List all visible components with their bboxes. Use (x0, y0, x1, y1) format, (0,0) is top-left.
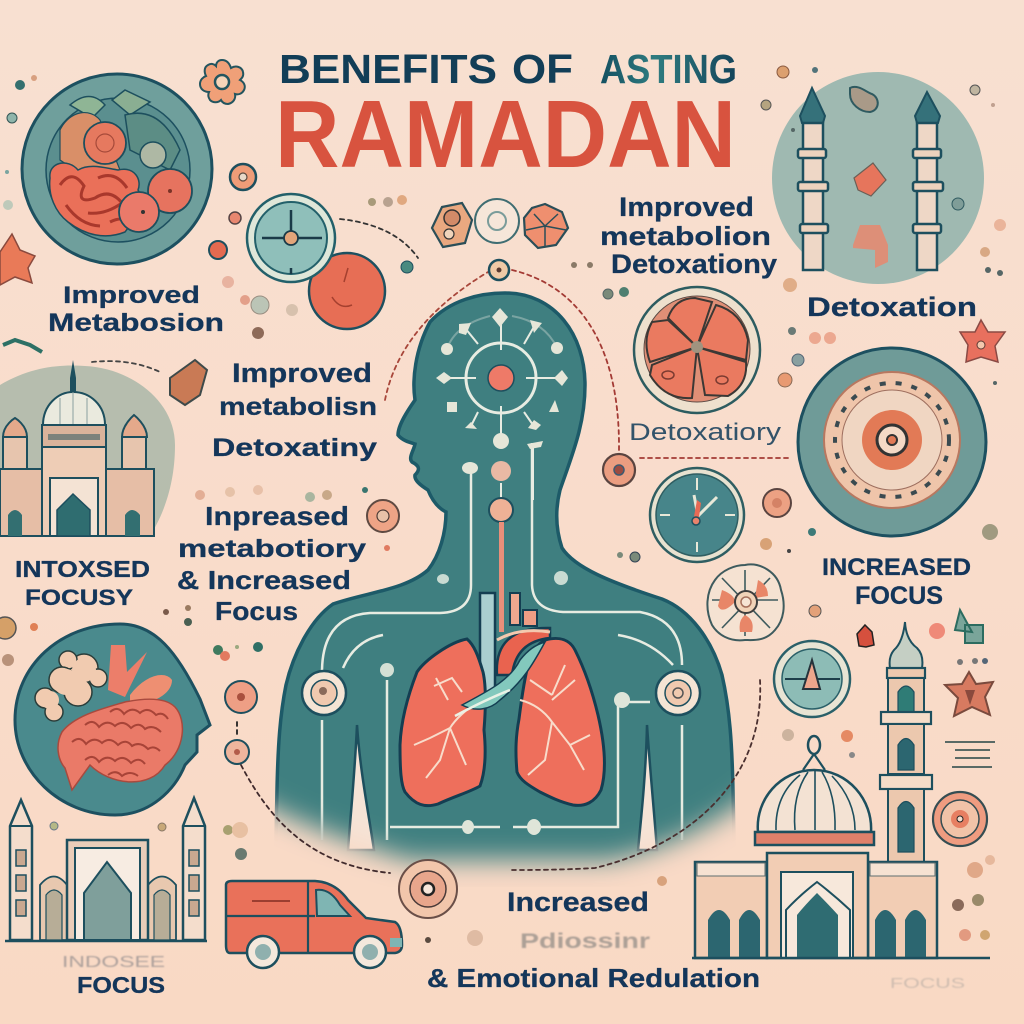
ornament flower right (707, 564, 784, 640)
dial circle right (798, 348, 986, 536)
label: intoxsed focusy: FOCUSY (25, 585, 133, 610)
right lung (516, 638, 605, 805)
label: increased focus (822, 554, 971, 610)
clock icon left (247, 194, 335, 282)
title: BENEFITS (279, 46, 497, 92)
title: ASTING (600, 46, 737, 92)
star right (945, 672, 993, 716)
minarets circle top right (772, 72, 984, 284)
label: improved metabolion detoxationy: Improved (619, 192, 754, 222)
dome (758, 736, 871, 832)
label: inpreased metabolism and increased focus: metabotiory (178, 535, 366, 563)
label: improved metabosion: Improved (63, 282, 200, 309)
plate of food icon (22, 74, 212, 264)
tomato icon (309, 253, 385, 329)
star top right (960, 320, 1005, 362)
label: inpreased metabolism and increased focus (177, 501, 366, 626)
label: improved metabolisn detoxatiny: Detoxatiny (212, 434, 377, 462)
dashed connector arcs (92, 219, 790, 873)
label: increased focus: INCREASED (822, 554, 971, 581)
minaret (880, 622, 932, 871)
label: inpreased metabolism and increased focus: & Increased (177, 565, 351, 595)
left body ring node (302, 671, 346, 715)
label: improved metabosion: Metabosion (48, 309, 224, 337)
circuit lines in the body (322, 443, 682, 840)
mosque right (692, 622, 990, 958)
brain in head profile icon (15, 624, 210, 815)
arm gaps (348, 725, 374, 850)
title: RAMADAN (275, 81, 736, 188)
label: inpreased metabolism and increased focus: Inpreased (205, 501, 349, 531)
brain network in head (436, 308, 568, 515)
compass icon (774, 641, 850, 717)
food plate flower icon (634, 287, 760, 413)
central human figure (275, 293, 735, 885)
label: improved metabolisn detoxatiny: metabolisn (219, 393, 377, 421)
ornament ring right (933, 792, 987, 846)
right body ring node (656, 671, 700, 715)
label: faded focus bottom left: FOCUS (77, 972, 165, 998)
label: intoxsed focusy: INTOXSED (15, 556, 150, 582)
top centre icons (432, 199, 568, 248)
title: OF (512, 46, 573, 92)
label: improved metabolion detoxationy: Detoxationy (611, 249, 777, 279)
label: improved metabosion (48, 282, 224, 337)
label: improved metabolion detoxationy: metabolion (600, 221, 771, 251)
label: faded focus bottom left: INDOSEE (62, 954, 165, 971)
label: increased and emotional regulation (427, 887, 760, 993)
label: improved metabolisn detoxatiny: Improved (232, 358, 372, 388)
heart (455, 628, 550, 716)
label: increased and emotional regulation: Increased (507, 887, 649, 917)
label: faded focus bottom left (62, 954, 165, 998)
label: detoxatiory: Detoxatiory (629, 419, 781, 446)
delivery van (226, 881, 402, 968)
gate mosque bottom left (5, 798, 207, 941)
label: increased and emotional regulation: & Emotional Redulation (427, 963, 760, 993)
label: faint focus bottom right: FOCUS (890, 975, 965, 992)
label: increased focus: FOCUS (855, 582, 943, 610)
small rings left of body (225, 500, 399, 764)
label: improved metabolisn detoxatiny (212, 358, 377, 462)
label: inpreased metabolism and increased focus: Focus (215, 596, 298, 626)
left lung (400, 639, 485, 806)
ring on head arc (489, 260, 509, 280)
clock icon right (650, 468, 744, 562)
target ring near bottom (399, 860, 457, 918)
spine and heart vessels (380, 498, 630, 835)
small star apple (857, 625, 874, 647)
flower icon top (200, 60, 245, 104)
rings around clock (603, 454, 791, 517)
label: improved metabolion detoxationy (600, 192, 777, 279)
small ring top left (230, 164, 256, 190)
label: intoxsed focusy (15, 556, 150, 610)
mosque circle left (0, 360, 175, 536)
label: detoxation: Detoxation (807, 292, 977, 322)
label: increased and emotional regulation: Pdiossinr (520, 930, 650, 953)
